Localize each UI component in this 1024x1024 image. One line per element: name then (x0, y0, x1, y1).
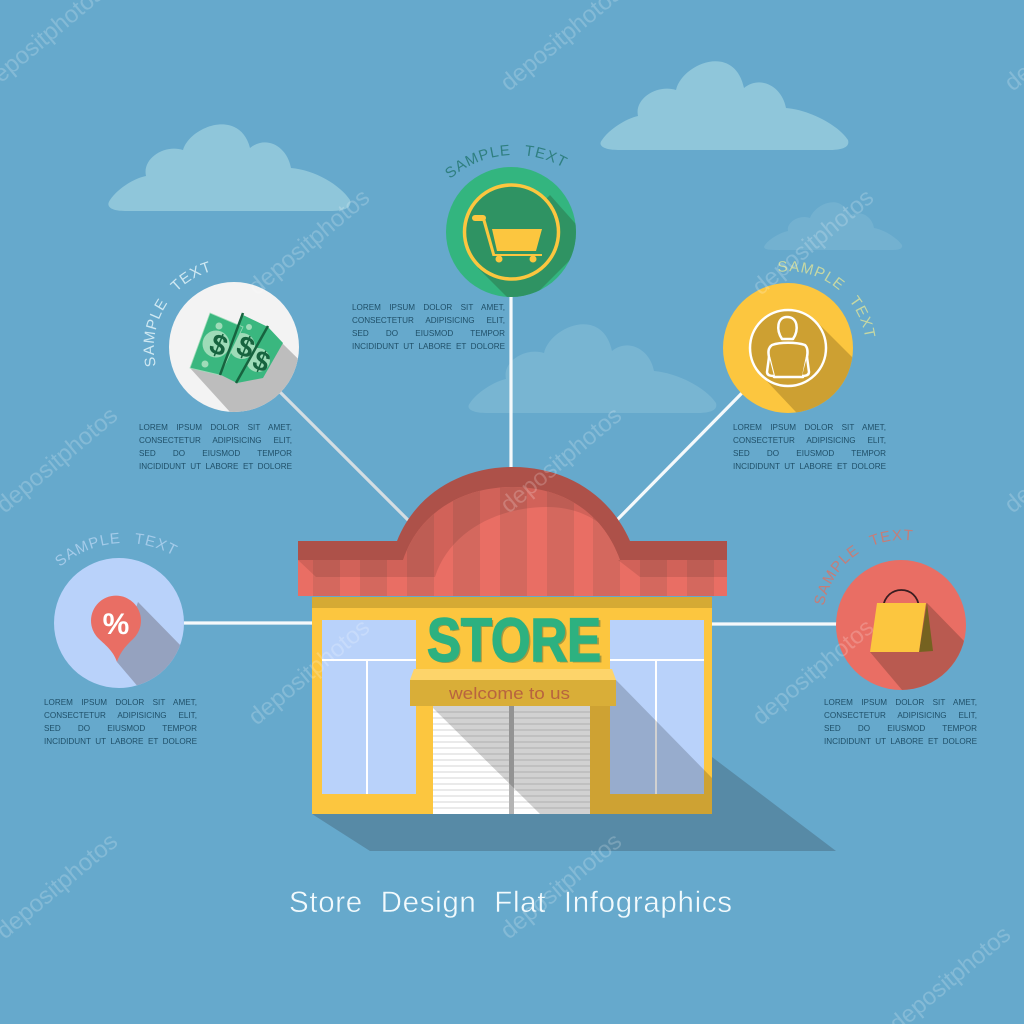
icon: shopping bag (870, 590, 933, 652)
curved label: SAMPLE TEXT (56, 532, 178, 566)
text block: bag: LOREM IPSUM DOLOR SIT AMET, (824, 698, 977, 707)
store sign: STORE (428, 608, 604, 676)
watermarks: depositphotos (243, 614, 375, 731)
panel: green cart circle (446, 144, 576, 297)
store building (298, 467, 727, 814)
text block: cart: SED DO EIUSMOD TEMPOR (352, 329, 505, 338)
left window (322, 620, 416, 794)
curved label: SAMPLE TEXT (446, 144, 568, 178)
text block: bag: CONSECTETUR ADIPISICING ELIT, (824, 711, 977, 720)
text block: person: CONSECTETUR ADIPISICING ELIT, (733, 436, 886, 445)
text block: percent: INCIDIDUNT UT LABORE ET DOLORE (44, 737, 197, 746)
watermarks: depositphotos (495, 828, 627, 945)
text block: cart: LOREM IPSUM DOLOR SIT AMET, (352, 303, 505, 312)
percent shadow (117, 602, 180, 686)
store sign: STORE (427, 606, 601, 674)
cloud: centre (468, 324, 716, 413)
text block: money (139, 423, 292, 471)
money shadow (190, 344, 298, 412)
text block: percent: LOREM IPSUM DOLOR SIT AMET, (44, 698, 197, 707)
text block: percent: CONSECTETUR ADIPISICING ELIT, (44, 711, 197, 720)
cart shadow (478, 195, 576, 297)
facade top band (312, 597, 712, 608)
text block: cart: INCIDIDUNT UT LABORE ET DOLORE (352, 342, 505, 351)
curved label: SAMPLE TEXT (144, 261, 208, 366)
watermarks: depositphotos (747, 184, 879, 301)
store facade (312, 597, 712, 814)
cloud: faint right (764, 202, 902, 250)
text block: bag: SED DO EIUSMOD TEMPOR (824, 724, 977, 733)
text block: money: CONSECTETUR ADIPISICING ELIT, (139, 436, 292, 445)
text block: bag: INCIDIDUNT UT LABORE ET DOLORE (824, 737, 977, 746)
person shadow (766, 324, 852, 412)
text block: person: LOREM IPSUM DOLOR SIT AMET, (733, 423, 886, 432)
cloud: top right (600, 61, 848, 150)
icon: percent pin (91, 596, 141, 662)
text block: person (733, 423, 886, 471)
watermarks: depositphotos (747, 614, 879, 731)
watermarks: depositphotos (243, 184, 375, 301)
icon: dollar bills: $ (232, 330, 259, 366)
roof (298, 467, 727, 596)
panel: red bag circle (814, 530, 966, 690)
icon: dollar bills: $ (205, 328, 232, 364)
connector lines (184, 295, 838, 624)
icon: dollar bills: $ (249, 344, 275, 379)
text block: cart (352, 303, 505, 351)
cloud: top left (108, 124, 350, 211)
text block: person: SED DO EIUSMOD TEMPOR (733, 449, 886, 458)
facade cast shadow (433, 680, 712, 814)
panel: white money circle (144, 261, 299, 412)
icon: person (750, 310, 826, 386)
curved label: SAMPLE TEXT (778, 261, 876, 336)
curved label: SAMPLE TEXT (814, 530, 913, 605)
store long shadow (312, 757, 836, 851)
text block: money: INCIDIDUNT UT LABORE ET DOLORE (139, 462, 292, 471)
text block: bag (824, 698, 977, 746)
text block: percent (44, 698, 197, 746)
text block: money: SED DO EIUSMOD TEMPOR (139, 449, 292, 458)
panel: yellow person circle (723, 261, 876, 413)
watermarks: depositphotos (495, 402, 627, 519)
text block: percent: SED DO EIUSMOD TEMPOR (44, 724, 197, 733)
icon: dollar bills (190, 313, 283, 383)
icon: shopping cart (472, 215, 542, 262)
text block: cart: CONSECTETUR ADIPISICING ELIT, (352, 316, 505, 325)
text block: person: INCIDIDUNT UT LABORE ET DOLORE (733, 462, 886, 471)
icon: percent pin: % (103, 608, 129, 641)
panel: lavender percent circle (54, 532, 184, 688)
title: Store Design Flat Infographics (289, 886, 732, 919)
cart ring (464, 185, 558, 279)
bag shadow (870, 603, 964, 690)
text block: money: LOREM IPSUM DOLOR SIT AMET, (139, 423, 292, 432)
welcome text: welcome to us (448, 685, 570, 703)
roller door (433, 706, 590, 814)
right window (610, 620, 704, 794)
door awning (410, 669, 616, 706)
